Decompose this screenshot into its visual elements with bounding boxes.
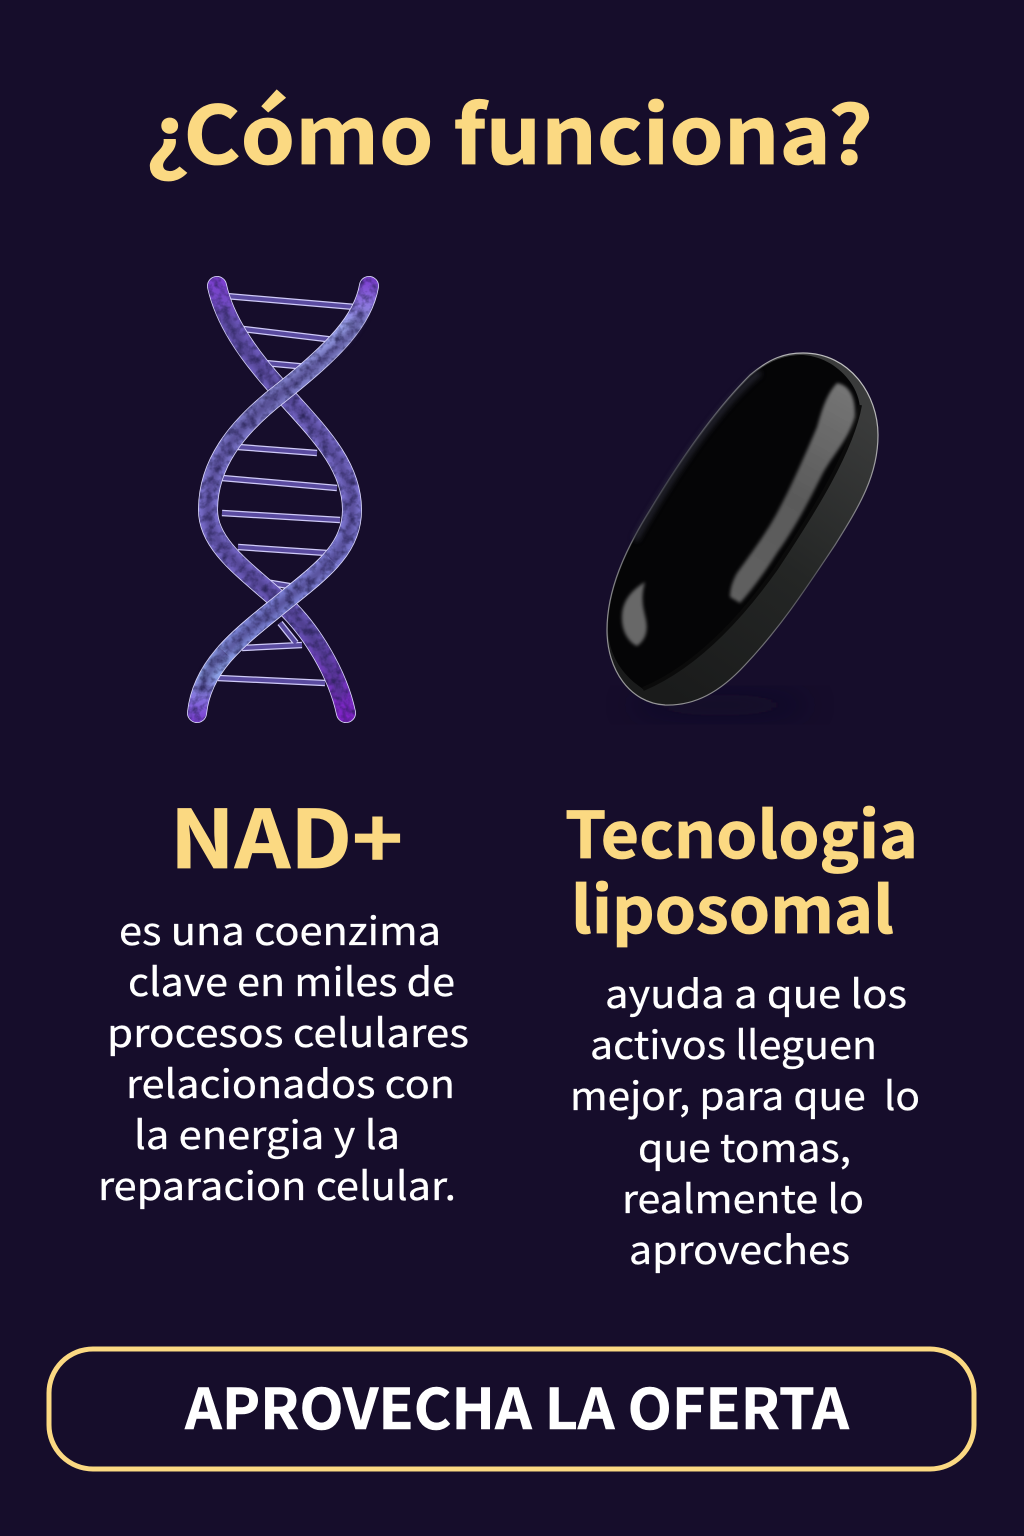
capsule small highlight <box>622 582 647 646</box>
heading: Tecnologia liposomal: liposomal <box>571 860 894 952</box>
heading: NAD+: NAD+ <box>170 776 403 892</box>
button: call to action <box>49 1349 974 1469</box>
heading: Tecnologia liposomal: Tecnologia <box>565 785 918 877</box>
text block: liposomal description <box>570 964 920 1276</box>
text block: liposomal description: aproveches <box>629 1220 850 1276</box>
capsule edge sheen <box>635 372 760 540</box>
DNA strand two <box>208 286 369 713</box>
capsule dark top half <box>608 355 860 689</box>
DNA rungs <box>218 296 355 683</box>
title: ¿Cómo funciona? <box>146 72 873 188</box>
DNA strand one <box>197 286 352 713</box>
text block: NAD+ description <box>98 901 469 1212</box>
text block: NAD+ description: reparacion celular. <box>98 1156 456 1212</box>
text block: liposomal description: ayuda a que los <box>605 964 907 1020</box>
capsule seam <box>643 405 860 689</box>
capsule shadow <box>630 693 810 717</box>
heading: Tecnologia liposomal <box>565 785 918 952</box>
text block: NAD+ description: la energia y la <box>134 1105 400 1161</box>
capsule body <box>607 353 878 705</box>
DNA strand one overlay at lower crossing <box>226 560 331 653</box>
text block: NAD+ description: clave en miles de <box>128 952 455 1008</box>
capsule main highlight <box>730 383 855 603</box>
icon: DNA double helix <box>197 286 369 713</box>
text block: liposomal description: mejor, para que lo <box>570 1066 920 1122</box>
text block: NAD+ description: es una coenzima <box>119 901 441 957</box>
text block: liposomal description: realmente lo <box>622 1169 864 1225</box>
button: call to action: APROVECHA LA OFERTA <box>184 1365 850 1446</box>
text block: liposomal description: activos lleguen <box>590 1015 877 1071</box>
text block: NAD+ description: relacionados con <box>126 1054 455 1110</box>
text block: liposomal description: que tomas, <box>638 1118 851 1174</box>
icon: black softgel capsule <box>607 353 878 717</box>
text block: NAD+ description: procesos celulares <box>107 1003 469 1059</box>
